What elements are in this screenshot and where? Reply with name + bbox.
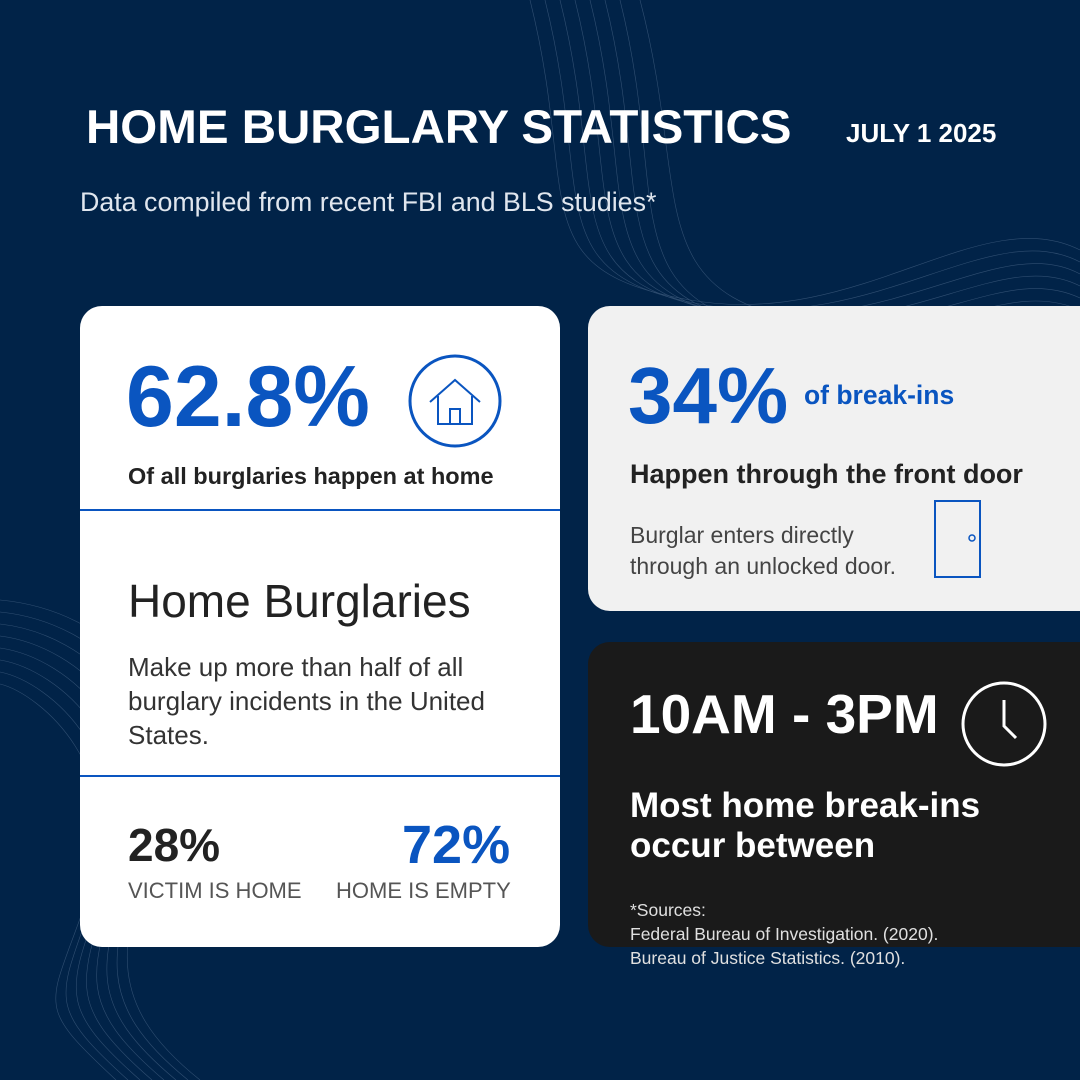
panel: time: Most home break-ins	[630, 786, 980, 825]
panel: front door: 34%	[628, 351, 788, 440]
icon: door	[934, 500, 981, 578]
panel: time: occur between	[630, 826, 875, 865]
stat 28%: 28%	[128, 819, 220, 871]
sources: Bureau of Justice Statistics. (2010).	[630, 948, 905, 968]
panel: time	[588, 642, 1080, 947]
panel: front door: through an unlocked door.	[630, 553, 896, 579]
sources: Federal Bureau of Investigation. (2020).	[630, 924, 938, 944]
panel: time: 10AM - 3PM	[630, 683, 939, 745]
sources	[630, 900, 938, 968]
caption: Of all burglaries happen at home	[128, 463, 494, 489]
subtitle: Data compiled from recent FBI and BLS studies*	[80, 187, 656, 217]
heading: Home Burglaries: Home Burglaries	[128, 575, 471, 627]
panel: front door: Burglar enters directly	[630, 522, 854, 548]
title: HOME BURGLARY STATISTICS	[86, 101, 791, 154]
panel: left card: HOME IS EMPTY	[336, 878, 511, 903]
icon: clock	[962, 682, 1046, 766]
text block: Make up more than half of all burglary incidents in the United States.	[128, 652, 485, 750]
stat 72%: 72%	[402, 815, 510, 875]
stat 62.8%: 62.8%	[126, 349, 370, 445]
panel: left card: VICTIM IS HOME	[128, 878, 302, 903]
sources: *Sources:	[630, 900, 706, 920]
date: JULY 1 2025	[846, 118, 996, 148]
panel: left card	[80, 306, 560, 947]
panel: front door: Happen through the front door	[630, 459, 1023, 489]
icon: house	[408, 354, 502, 448]
panel: front door: of break-ins	[804, 380, 954, 410]
panel: front door	[588, 306, 1080, 611]
